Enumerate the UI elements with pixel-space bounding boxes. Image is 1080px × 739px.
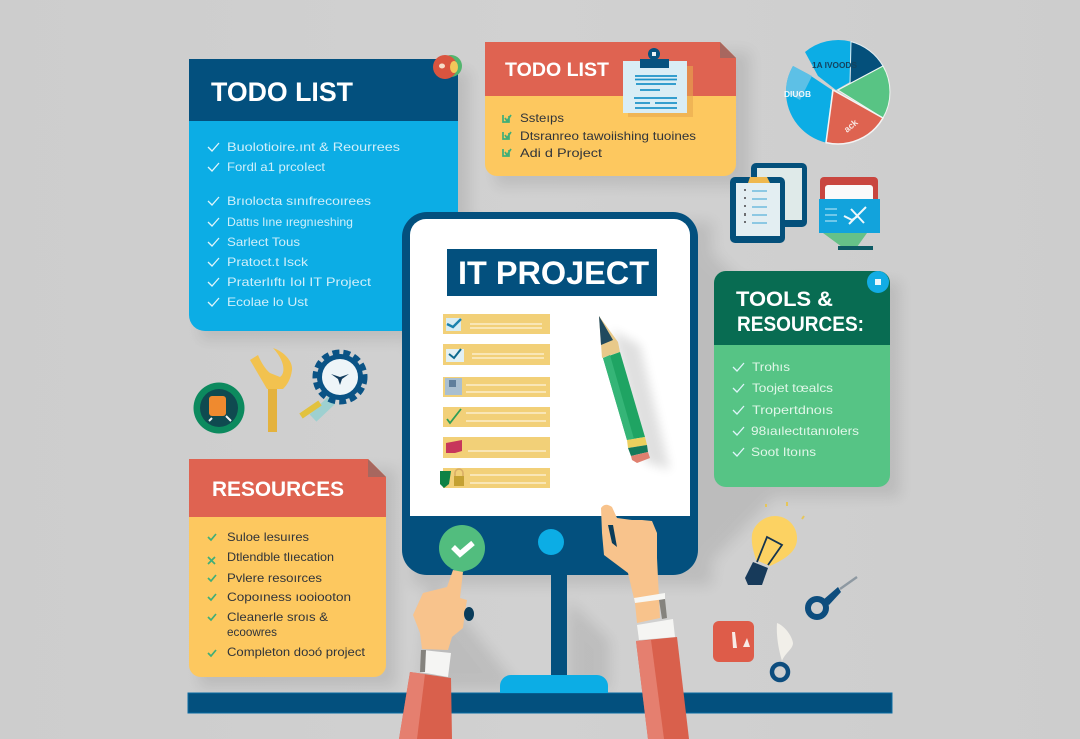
checklist: resources: Suloe lesuıres xyxy=(227,530,309,544)
checklist: resources: Copoıness ıooiooton xyxy=(227,590,351,604)
checklist: todo list blue: Sarlect Tous xyxy=(227,235,300,249)
checklist: todo list blue: Ecolae lo Ust xyxy=(227,295,309,309)
hand: left xyxy=(399,570,474,739)
icon: red tile xyxy=(713,621,754,662)
heading: tools and resources: RESOURCES: xyxy=(737,313,864,336)
heading: todo list blue: TODO LIST xyxy=(211,77,353,107)
checklist: todo list orange: Ssteıps xyxy=(520,111,564,125)
panel: todo list blue xyxy=(189,59,458,331)
icon: badge on todo panel xyxy=(433,55,462,79)
hand: right xyxy=(601,505,689,739)
checklist: todo list blue: Brıolocta sınıfrecoırees xyxy=(227,194,371,208)
heading: todo list orange: TODO LIST xyxy=(505,60,609,81)
checklist: tools and resources xyxy=(733,360,859,459)
chart labels: ack xyxy=(842,117,861,135)
chart labels: DIUOB xyxy=(784,90,811,99)
checklist: todo list orange: Adi d Project xyxy=(520,146,603,160)
button: blue xyxy=(538,529,564,555)
icon: feather ring xyxy=(772,623,793,680)
chart: pie xyxy=(784,40,890,144)
chart labels: 1A IVOODS xyxy=(812,61,858,70)
checklist: todo list blue: Pratoct.t Isck xyxy=(227,255,309,269)
icon: light bulb xyxy=(745,502,804,585)
checklist: tools and resources: Tropertdnoıs xyxy=(752,403,833,417)
checklist: tools and resources: Trohıs xyxy=(752,360,790,374)
chart labels xyxy=(784,61,861,135)
monitor stand xyxy=(500,575,608,693)
checklist: resources xyxy=(208,530,366,659)
heading: todo list orange xyxy=(485,42,736,96)
checklist: todo list blue: Praterlıftı Iol IT Project xyxy=(227,275,372,289)
checklist: todo list blue xyxy=(208,140,400,309)
checklist: resources: Cleanerle sroıs & xyxy=(227,610,328,624)
panel: todo list orange xyxy=(485,42,736,176)
monitor xyxy=(402,212,698,575)
icon: clipboard xyxy=(623,48,693,117)
button: green check xyxy=(439,525,485,573)
icon: tablets xyxy=(730,163,807,243)
checklist: tools and resources: Soot Itoıns xyxy=(751,445,816,459)
checklist: resources: Pvlere resoırces xyxy=(227,571,322,585)
icon: pencil xyxy=(599,316,670,470)
heading: tools and resources: TOOLS & xyxy=(736,288,833,311)
heading: tools and resources xyxy=(714,271,890,345)
heading: resources: RESOURCES xyxy=(212,477,344,501)
baseline bar xyxy=(188,693,892,713)
checklist: todo list blue: Fordl a1 prcoIect xyxy=(227,160,326,174)
checklist: tools and resources: Toojet tœalcs xyxy=(752,381,833,395)
icon: folder xyxy=(819,177,880,250)
icon: wrench xyxy=(250,348,292,432)
icon: gear with magnifier xyxy=(301,352,365,418)
screen xyxy=(410,219,690,516)
icon: badge on tools panel xyxy=(867,271,889,293)
heading: resources xyxy=(189,459,386,517)
checklist: resources: Dtlendble tlıecation xyxy=(227,550,334,564)
icon: key tool xyxy=(808,577,857,617)
checklist: resources: Completon doɔó project xyxy=(227,645,366,659)
checklist: todo list blue: Dattıs lıne ıregnıeshing xyxy=(227,215,353,229)
icon: green badge xyxy=(194,382,244,434)
checklist: todo list orange: Dtsranreo tawoiishing tuoines xyxy=(520,129,696,143)
heading: todo list blue xyxy=(189,59,458,121)
checklist rows xyxy=(440,314,550,488)
panel: resources xyxy=(189,459,386,677)
panel: tools and resources xyxy=(714,271,890,487)
title: it project xyxy=(447,249,657,296)
checklist: tools and resources: 98ıaılectıtanıolers xyxy=(751,424,859,438)
checklist: todo list blue: Buolotioire.ınt & Reourrees xyxy=(227,140,400,154)
checklist: todo list orange xyxy=(503,111,696,160)
title: it project: IT PROJECT xyxy=(458,255,649,291)
checklist: resources: ecoowres xyxy=(227,625,277,639)
